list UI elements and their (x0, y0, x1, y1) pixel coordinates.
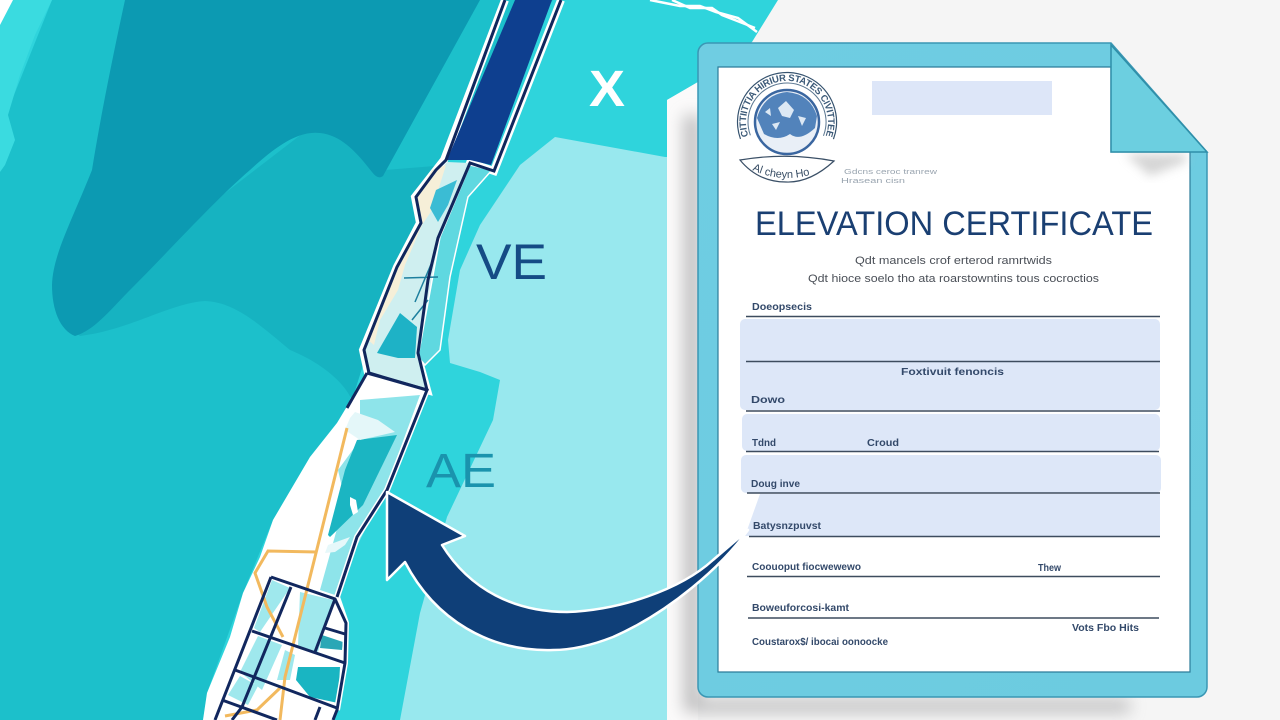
island: yellow roads (225, 428, 347, 720)
island: foam patch (325, 537, 350, 553)
title: ELEVATION CERTIFICATE (755, 205, 1153, 243)
agency text (841, 169, 938, 185)
island: white foam (350, 497, 358, 515)
seal: blue medallion (755, 90, 819, 154)
map zone: deep water (52, 0, 480, 336)
seal (736, 72, 838, 183)
seal: inner ring (737, 72, 837, 172)
panel: paper backing (667, 82, 698, 720)
fold shadow (1125, 154, 1186, 176)
barrier island (203, 0, 561, 720)
form labels: Coustarox$/ ibocai oonoocke (752, 636, 888, 648)
arrow: certificate to map (387, 492, 748, 650)
agency text: Hrasean cisn (841, 178, 905, 185)
subtitle (808, 255, 1100, 285)
island: teal block (320, 635, 343, 650)
document frame (698, 43, 1207, 697)
form rules (746, 316, 1160, 618)
folded corner (1111, 45, 1207, 152)
map zone: bright coastal strip (0, 0, 52, 172)
form labels: Thew (1038, 562, 1062, 574)
island: upper land (363, 162, 470, 390)
island: light marsh (320, 395, 420, 595)
island: sand (368, 165, 446, 345)
island: foam upper (345, 412, 395, 440)
form labels: Foxtivuit fenoncis (901, 366, 1004, 378)
agency text: Gdcns ceroc tranrew (844, 169, 938, 176)
map zone: white corner (0, 0, 13, 25)
form labels: Coouoput fiocwewewo (752, 561, 861, 573)
map zone: mid-depth water (60, 120, 447, 400)
island: dark road outline upper (364, 0, 561, 390)
form labels: Doeopsecis (752, 301, 812, 313)
island: lower land (203, 373, 427, 720)
seal: outer ring (724, 59, 850, 185)
island: blue marsh (430, 180, 457, 222)
seal: ribbon text: Al cheyn Ho (752, 164, 809, 180)
seal: lettered ring: CITTIITTIA HIRIUR STATES CIVITTEE (739, 74, 835, 138)
island: upper light side strip (418, 165, 492, 365)
island: grid lagoon (296, 667, 340, 703)
map zone: left water (0, 0, 553, 720)
subtitle: Qdt hioce soelo tho ata roarstowntins tous cocroctios (808, 273, 1100, 285)
island: grid blocks (228, 580, 333, 705)
zone label: AE: AE (426, 445, 496, 498)
seal: medallion highlights (765, 101, 806, 130)
form labels: Boweuforcosi-kamt (752, 602, 849, 614)
seal: ribbon (740, 156, 834, 182)
document shadow (684, 115, 1130, 712)
panel: elevation certificate document (697, 42, 1209, 698)
form labels (751, 301, 1139, 648)
zone label: X: X (589, 60, 625, 117)
seal: medallion art (757, 92, 817, 138)
island: upper casing (363, 0, 561, 390)
document sheet (718, 67, 1190, 672)
form labels: Doug inve (751, 478, 800, 490)
map detail: white shoreline squiggle (650, 0, 757, 32)
map zone: light AE flood area (400, 137, 668, 720)
zone label: VE: VE (476, 234, 547, 290)
form bands (740, 319, 1161, 536)
panel: flood map (0, 0, 778, 720)
subtitle: Qdt mancels crof erterod ramrtwids (855, 255, 1053, 267)
island: navy street grid (215, 373, 427, 720)
form labels: Croud (867, 437, 899, 449)
form labels: Tdnd (752, 437, 776, 449)
form labels: Vots Fbo Hits (1072, 622, 1139, 634)
island: lagoon lower (328, 435, 397, 537)
form labels: Batysnzpuvst (753, 520, 822, 532)
form labels: Dowo (751, 394, 785, 406)
island: lagoon (377, 313, 417, 358)
island: navy channel (447, 0, 552, 165)
map zone: right shallow water (0, 0, 778, 720)
island: white road casing (337, 390, 427, 710)
island: marsh detail (404, 262, 438, 320)
header field (872, 81, 1052, 115)
